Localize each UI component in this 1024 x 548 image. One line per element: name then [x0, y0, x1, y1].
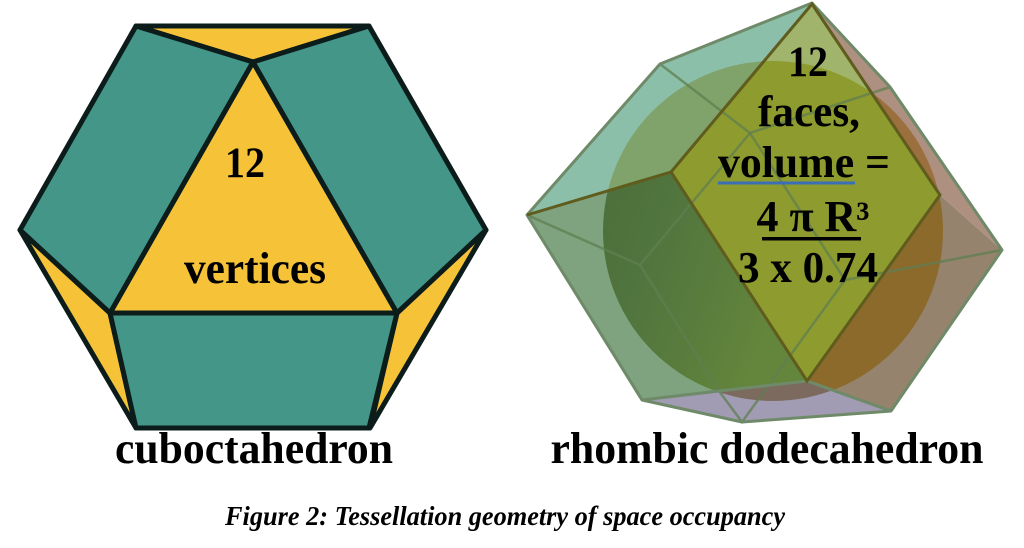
label: 12 faces and volume formula [718, 39, 890, 292]
label: 12 faces and volume formula: 12 [788, 39, 828, 86]
label: 12 faces and volume formula: 3 x 0.74 [738, 243, 878, 292]
rhombic dodecahedron diagram with inscribed sphere [527, 3, 1002, 422]
face: yellow triangles [20, 26, 486, 428]
translucent outer faces [527, 3, 1002, 422]
label: 12 faces and volume formula: faces, [758, 87, 860, 136]
outline edges [527, 3, 1002, 422]
cuboctahedron diagram [20, 26, 486, 428]
label: 12 faces and volume formula: volume = [718, 138, 890, 187]
blue underline [718, 182, 855, 184]
label: 12 vertices [184, 140, 326, 293]
caption: rhombic dodecahedron: rhombic dodecahedron [550, 424, 984, 473]
caption: cuboctahedron: cuboctahedron [115, 424, 393, 473]
label: 12 faces and volume formula: 4 π R³ [756, 192, 870, 241]
hidden back edges [527, 64, 1002, 422]
sphere seen through the faces [603, 61, 943, 401]
fraction bar [762, 237, 861, 240]
face: teal squares [20, 26, 486, 428]
figure caption: Figure 2: Tessellation geometry of space occupancy [224, 501, 786, 531]
front rhombus edges [527, 4, 940, 381]
label: 12 vertices: vertices [184, 244, 326, 293]
label: 12 vertices: 12 [225, 140, 265, 187]
